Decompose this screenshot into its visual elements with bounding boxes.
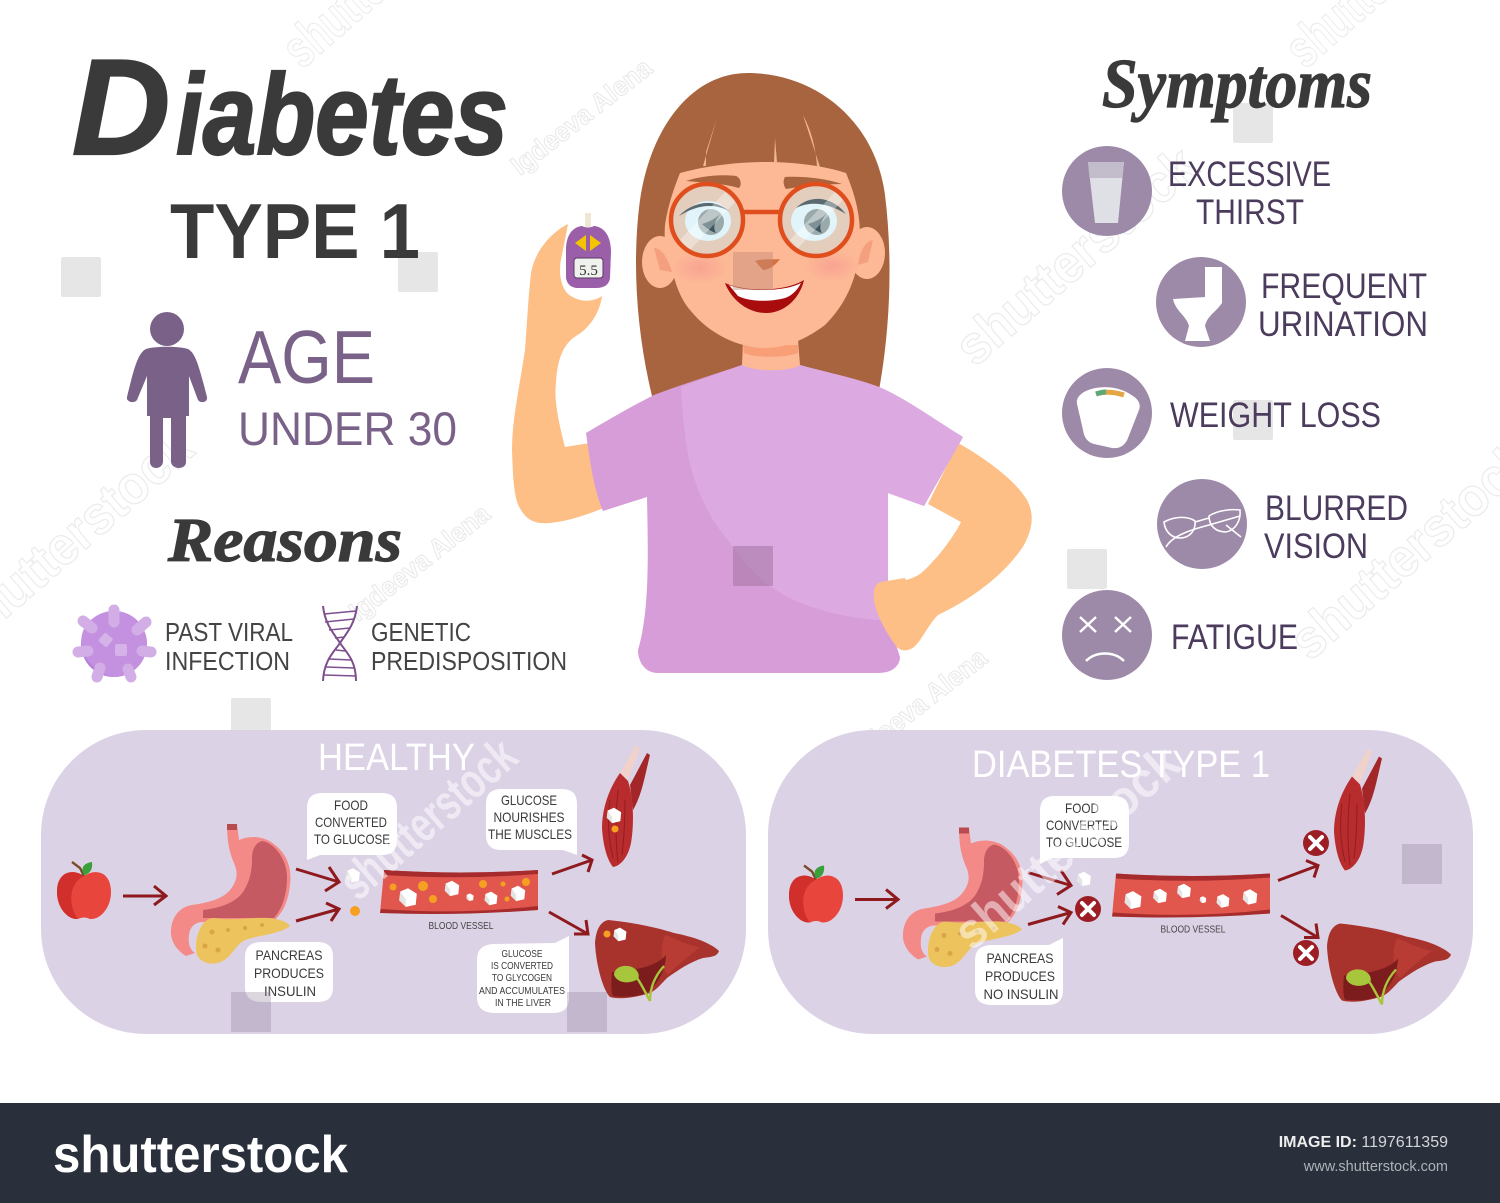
bubble: glucose nourishes: NOURISHES bbox=[494, 809, 564, 825]
text: past viral infection: INFECTION bbox=[165, 646, 290, 676]
text: past viral infection: PAST VIRAL bbox=[165, 617, 293, 647]
stock watermarks on white: Igdeeva Alena bbox=[840, 642, 993, 771]
icon: virus bbox=[78, 610, 151, 677]
text: excessive thirst bbox=[1168, 155, 1331, 232]
liver bbox=[595, 920, 719, 1001]
footer bar bbox=[0, 1103, 1500, 1203]
right arm bbox=[874, 443, 1032, 650]
text: age bbox=[238, 315, 457, 455]
icon: bathroom scale bbox=[1062, 368, 1152, 458]
liver bbox=[1327, 924, 1451, 1004]
bubble: pancreas produces insulin: INSULIN bbox=[264, 983, 316, 999]
text: frequent urination bbox=[1258, 267, 1428, 344]
icon: apple bbox=[789, 866, 843, 923]
arrows bbox=[123, 855, 592, 934]
bubble: glucose nourishes: THE MUSCLES bbox=[488, 826, 572, 842]
hand over hip bbox=[874, 578, 925, 650]
image id: IMAGE ID: 1197611359 bbox=[1279, 1134, 1448, 1151]
muscle bbox=[602, 745, 650, 867]
character: girl with glucose meter bbox=[512, 73, 1032, 673]
blood vessel bbox=[1112, 874, 1270, 918]
bubble: glycogen in the liver: IS CONVERTED bbox=[491, 960, 553, 972]
bubble: food converted bbox=[307, 793, 397, 860]
bubble: food converted: CONVERTED bbox=[1046, 817, 1118, 833]
mouth bbox=[725, 280, 804, 313]
text: excessive thirst: EXCESSIVE bbox=[1168, 155, 1331, 194]
bubble: glycogen in the liver: TO GLYCOGEN bbox=[492, 972, 552, 984]
bubble: glycogen in the liver: GLUCOSE bbox=[502, 948, 542, 960]
lenses bbox=[671, 184, 743, 256]
text: excessive thirst: THIRST bbox=[1196, 193, 1304, 232]
icon: person bbox=[127, 312, 207, 468]
bubble: glycogen in the liver bbox=[477, 936, 569, 1013]
bubble: food converted: CONVERTED bbox=[315, 814, 387, 830]
arrows bbox=[855, 860, 1318, 938]
bubble: pancreas produces insulin: PRODUCES bbox=[254, 965, 324, 981]
cheeks bbox=[672, 252, 728, 284]
ears bbox=[642, 236, 678, 288]
bubble: glucose nourishes: GLUCOSE bbox=[501, 792, 557, 808]
glucose cube bbox=[1077, 872, 1091, 886]
text: age: AGE bbox=[238, 315, 375, 399]
label: blood vessel: BLOOD VESSEL bbox=[428, 921, 494, 932]
bubble: food converted bbox=[1040, 796, 1129, 864]
nose bbox=[755, 259, 780, 270]
bubble: pancreas produces insulin: PANCREAS bbox=[256, 947, 322, 963]
website: www.shutterstock.com bbox=[1303, 1159, 1448, 1175]
glasses frame bbox=[671, 184, 852, 256]
watermarks over panels: shutterstock bbox=[942, 734, 1191, 960]
text: frequent urination: FREQUENT bbox=[1261, 267, 1427, 306]
cross: no insulin bbox=[1075, 896, 1101, 922]
organs shifted group bbox=[789, 748, 1451, 1004]
panel title: healthy: HEALTHY bbox=[318, 737, 475, 779]
watermarks over panels: shutterstock bbox=[328, 727, 528, 910]
text: frequent urination: URINATION bbox=[1258, 305, 1428, 344]
text: age: UNDER 30 bbox=[238, 402, 457, 455]
bubble: pancreas produces insulin bbox=[245, 942, 333, 1002]
bubble: glycogen in the liver: AND ACCUMULATES bbox=[479, 985, 565, 997]
hair bbox=[636, 73, 890, 396]
icon: toilet bbox=[1156, 257, 1246, 347]
blood vessel bbox=[380, 870, 538, 914]
glucose meter bbox=[566, 213, 611, 288]
bubble: glucose nourishes bbox=[486, 789, 577, 855]
stomach and pancreas bbox=[171, 824, 290, 964]
icon: glasses bbox=[1157, 479, 1247, 569]
watermark squares on the character bbox=[733, 252, 773, 586]
neck bbox=[742, 340, 800, 370]
text: genetic predisposition: PREDISPOSITION bbox=[371, 646, 567, 676]
text: blurred vision: VISION bbox=[1264, 527, 1368, 566]
icon: dna helix bbox=[323, 606, 357, 681]
title: Diabetes: iabetes bbox=[176, 52, 508, 179]
title: Diabetes: D bbox=[72, 31, 170, 183]
bubble: food converted: FOOD bbox=[1065, 800, 1099, 816]
stock watermarks on white: Igdeeva Alena bbox=[505, 52, 658, 181]
title: Diabetes bbox=[72, 31, 508, 183]
bubble: food converted: FOOD bbox=[334, 797, 368, 813]
bubble: pancreas produces no insulin bbox=[975, 938, 1063, 1005]
heading: Symptoms: Symptoms bbox=[1102, 46, 1372, 123]
icon: glass of water bbox=[1062, 146, 1152, 236]
face bbox=[665, 162, 860, 348]
text: weight loss: WEIGHT LOSS bbox=[1170, 396, 1381, 435]
lens glare bbox=[680, 192, 843, 250]
footer logo: shutterstock bbox=[53, 1126, 348, 1184]
heading: Reasons: Reasons bbox=[167, 507, 402, 575]
shirt bbox=[586, 365, 963, 673]
stock watermarks on white: Igdeeva Alena bbox=[343, 498, 496, 627]
stock watermarks on white bbox=[0, 0, 1500, 771]
hair strands bbox=[703, 115, 820, 167]
text: blurred vision: BLURRED bbox=[1265, 489, 1408, 528]
text: genetic predisposition bbox=[371, 617, 567, 676]
heading: TYPE 1: TYPE 1 bbox=[170, 187, 420, 275]
bubble: pancreas produces no insulin: PANCREAS bbox=[986, 950, 1054, 966]
muscle bbox=[1334, 748, 1382, 870]
eyes bbox=[685, 201, 731, 241]
shirt highlight bbox=[681, 365, 963, 620]
icon: apple bbox=[57, 862, 111, 919]
cross: liver bbox=[1293, 940, 1319, 966]
text: blurred vision bbox=[1264, 489, 1408, 566]
bubble: food converted: TO GLUCOSE bbox=[314, 831, 390, 847]
bubble: pancreas produces no insulin: PRODUCES bbox=[985, 968, 1055, 984]
panel: diabetes type 1 bbox=[768, 730, 1473, 1034]
glucose and insulin by the vessel bbox=[346, 868, 360, 916]
glucose meter: 5.5 bbox=[579, 263, 598, 279]
bubble: pancreas produces no insulin: NO INSULIN bbox=[984, 986, 1058, 1002]
text: past viral infection bbox=[165, 617, 293, 676]
icon: sad face bbox=[1062, 590, 1152, 680]
stock watermarks on white: shutterstock bbox=[944, 134, 1210, 377]
label: blood vessel: BLOOD VESSEL bbox=[1160, 924, 1226, 936]
bubble: food converted: TO GLUCOSE bbox=[1046, 834, 1122, 850]
stomach and pancreas bbox=[903, 828, 1022, 967]
left arm bbox=[512, 224, 604, 523]
bubble: glycogen in the liver: IN THE LIVER bbox=[495, 997, 551, 1009]
panel: healthy bbox=[41, 730, 746, 1034]
eyebrows bbox=[686, 175, 741, 188]
panel title: diabetes type 1: DIABETES TYPE 1 bbox=[972, 744, 1270, 786]
cross: muscles bbox=[1303, 830, 1329, 856]
text: genetic predisposition: GENETIC bbox=[371, 617, 471, 647]
text: fatigue: FATIGUE bbox=[1171, 618, 1298, 657]
watermarks over panels bbox=[231, 727, 1442, 1032]
